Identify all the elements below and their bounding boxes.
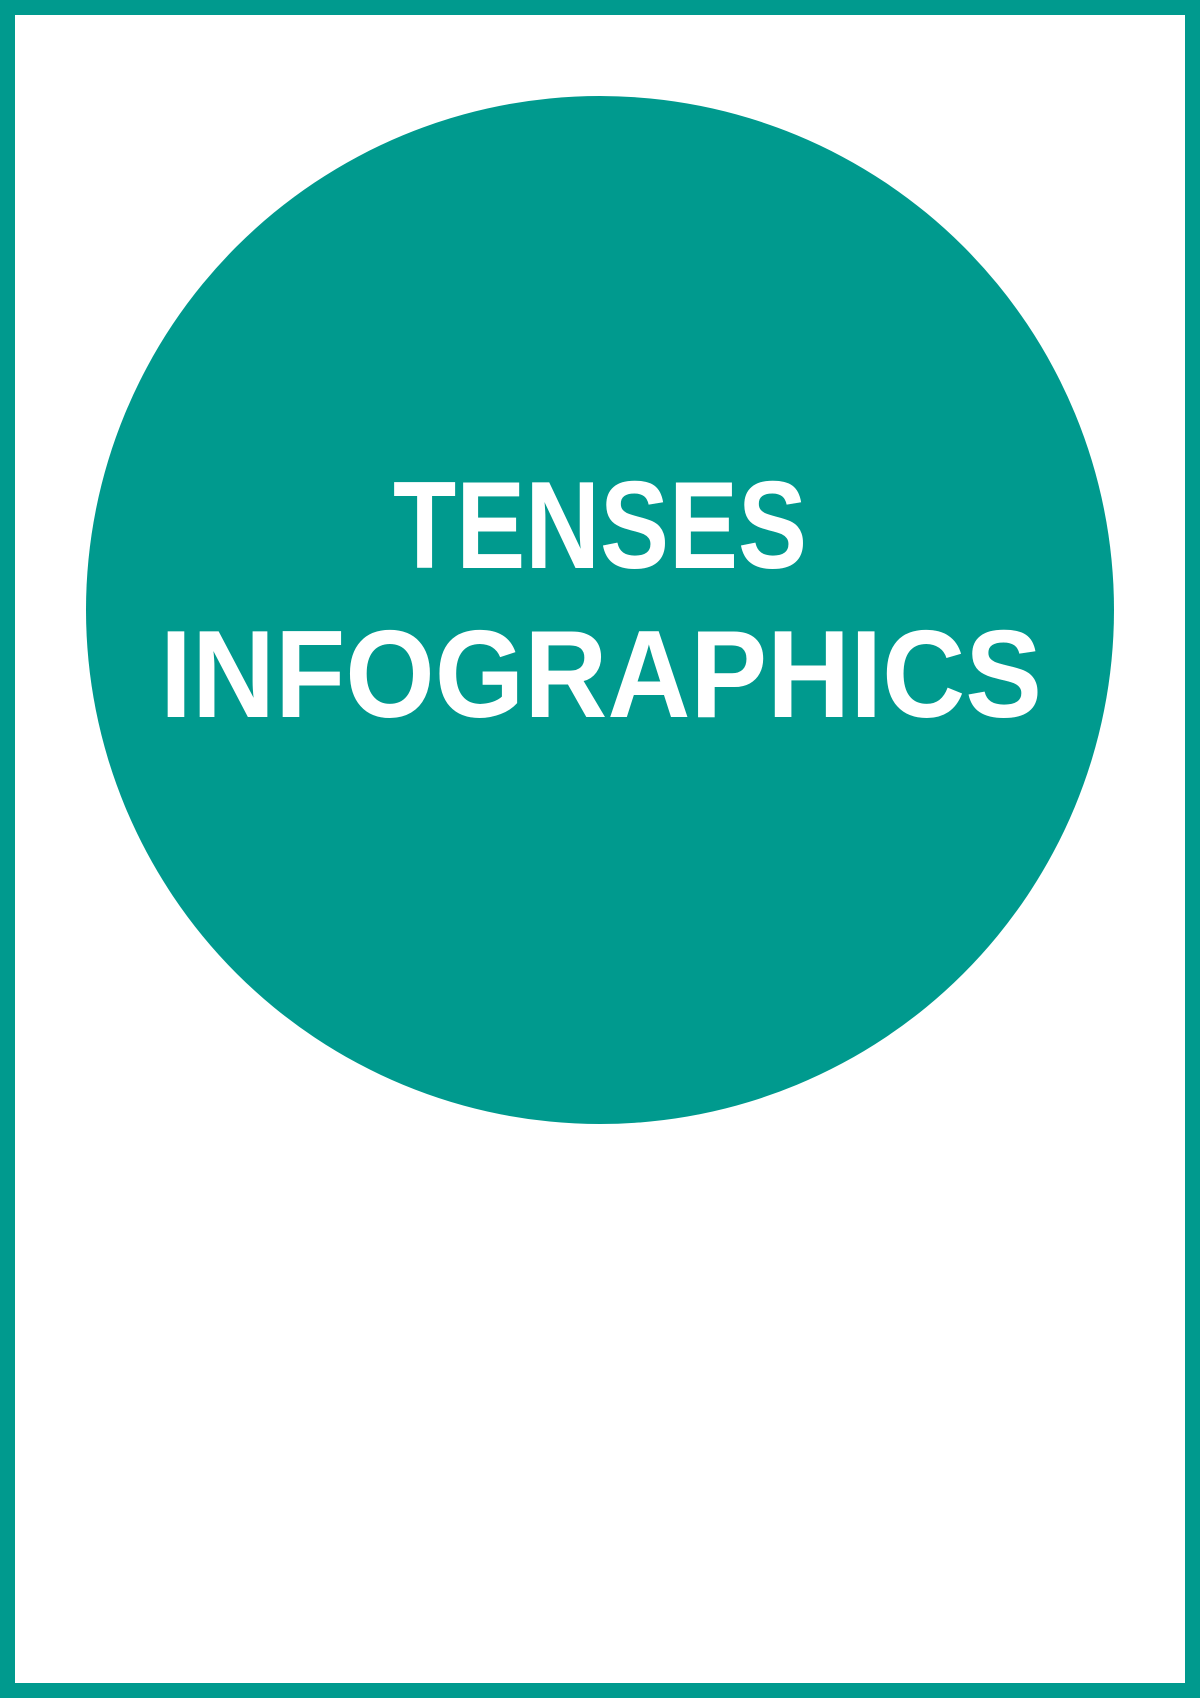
title: TENSES: [393, 457, 807, 595]
circle background: [86, 96, 1114, 1124]
title: [160, 457, 1042, 744]
title: INFOGRAPHICS: [160, 606, 1042, 744]
